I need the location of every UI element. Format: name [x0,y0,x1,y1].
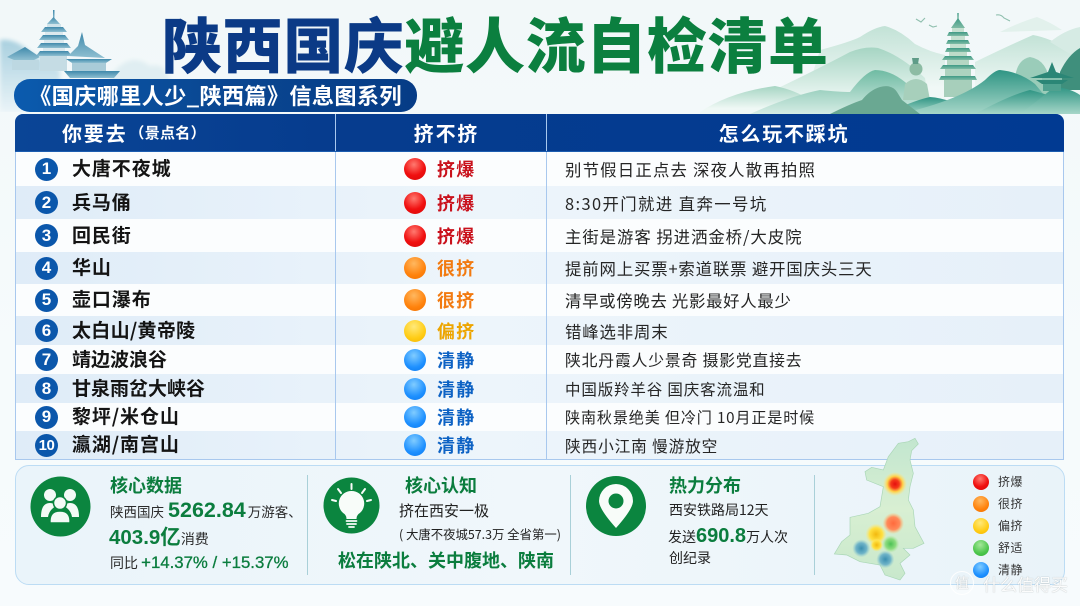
row 10 [16,431,1063,459]
row 7: 清静 [437,346,476,372]
row 1: 挤爆 [437,156,476,182]
row 5: 清早或傍晚去 光影最好人最少 [565,288,792,312]
row 6: 错峰选非周末 [565,318,668,342]
icon: terracotta warrior [903,58,930,100]
row 8: 清静 [437,376,476,402]
row 3: 3 [42,226,51,244]
legend: crowded [973,495,1023,512]
row 7: 7 [42,350,51,368]
row 10: 清静 [437,432,476,458]
row 5: 壶口瀑布 [72,285,152,312]
row 9: 陕南秋景绝美 但冷门 10月正是时候 [565,406,815,428]
icon: pavilion [1030,62,1074,91]
row 4 [16,252,1063,284]
row 3: 挤爆 [437,222,476,248]
table [15,114,1064,460]
heading: core insight: 核心认知 [405,472,477,498]
text: passengers: 发送690.8万人次 [668,525,788,547]
legend: very crowded [973,473,1023,490]
subtitle pill: 《国庆哪里人少_陕西篇》信息图系列 [29,79,402,111]
legend: quiet: 清静 [998,561,1023,578]
text: crowded in Xi'an: 挤在西安一极 [399,500,489,521]
text: year on year: 同比 +14.37% / +15.37% [110,553,289,573]
scenery: right mountains and pagoda [709,13,1080,114]
heat map of Shaanxi [834,438,924,580]
text: Datang note: ( 大唐不夜城57.3万 全省第一) [399,525,561,543]
text: visitors: 陕西国庆 5262.84万游客、 [110,498,302,522]
row 4: 提前网上买票+索道联票 避开国庆头三天 [565,256,873,280]
row 8 [16,374,1063,403]
column head: tips: 怎么玩不踩坑 [719,118,849,147]
text: railway days: 西安铁路局12天 [669,500,769,520]
text: quiet regions: 松在陕北、关中腹地、陕南 [338,547,554,573]
row 7: 陕北丹霞人少景奇 摄影党直接去 [565,348,802,371]
legend [973,473,1023,578]
legend: somewhat crowded: 偏挤 [998,517,1023,534]
row 9 [16,403,1063,431]
column head: crowd level: 挤不挤 [414,118,479,147]
row 4: 很挤 [437,255,476,281]
watermark: 什么值得买 [983,571,1068,596]
scenery: left temples [0,10,170,110]
text: spending: 403.9亿消费 [109,526,209,549]
row 5: 很挤 [437,287,476,313]
row 10: 瀛湖/南宫山 [72,430,180,457]
row 9: 9 [42,407,51,426]
table header [15,114,1064,151]
row 6: 6 [42,320,51,340]
heading: heat distribution: 热力分布 [669,472,741,498]
column head: destination [62,118,206,147]
row 8: 中国版羚羊谷 国庆客流温和 [565,378,766,400]
row 2: 2 [42,192,51,212]
row 2: 兵马俑 [72,188,132,214]
row 6: 偏挤 [437,318,476,344]
row 1 [16,152,1063,186]
row 2: 挤爆 [437,190,476,216]
row 8: 甘泉雨岔大峡谷 [72,374,205,400]
legend: very crowded: 挤爆 [998,473,1023,490]
row 9: 黎坪/米仓山 [72,402,180,429]
row 6: 太白山/黄帝陵 [72,316,195,342]
heading: core data: 核心数据 [110,472,182,498]
row 7: 靖边波浪谷 [72,344,167,372]
legend: comfortable: 舒适 [998,539,1023,556]
row 1: 大唐不夜城 [72,154,172,181]
row 6 [16,316,1063,345]
column head: destination: 你要去 [62,118,127,147]
icon: location pin [586,476,646,536]
icon: light bulb [324,478,380,534]
panel: summary background [15,465,1065,585]
icon: people [30,476,90,536]
row 5 [16,284,1063,316]
title: 陕西国庆避人流自检清单 [162,0,829,86]
row 4: 华山 [72,253,112,280]
text: record: 创纪录 [669,548,711,568]
row 3: 主街是游客 拐进洒金桥/大皮院 [565,224,802,248]
row 9: 清静 [437,404,476,430]
row 2 [16,186,1063,219]
row 4: 4 [42,258,51,277]
legend: somewhat crowded [973,517,1023,534]
row 2: 8:30开门就进 直奔一号坑 [565,190,768,214]
row 1: 别节假日正点去 深夜人散再拍照 [565,157,816,181]
row 3: 回民街 [72,220,132,248]
row 7 [16,345,1063,374]
row 8: 8 [42,378,51,398]
row 10: 10 [39,436,54,454]
column head: destination: （景点名） [129,122,206,143]
row 5: 5 [42,290,51,309]
row 10: 陕西小江南 慢游放空 [565,434,718,456]
row 3 [16,219,1063,252]
icon: pagoda [939,13,977,97]
legend: crowded: 很挤 [998,495,1023,512]
legend: quiet [973,561,1023,578]
legend: comfortable [973,539,1023,556]
watermark: 值 [955,573,969,593]
row 1: 1 [42,159,51,178]
